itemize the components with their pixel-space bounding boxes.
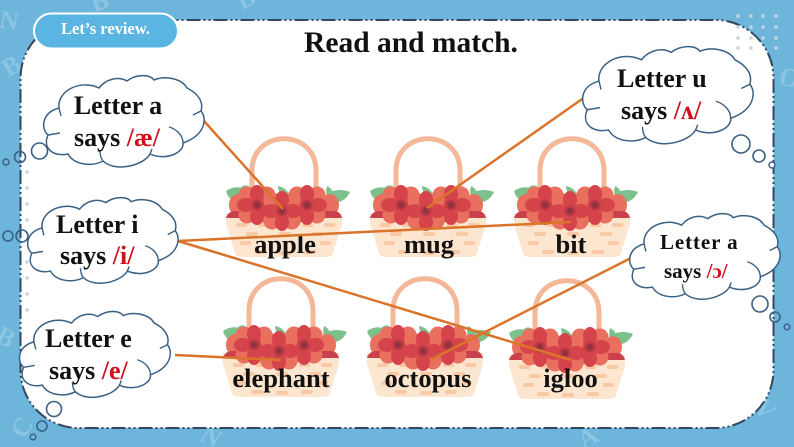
cloud: Letter e /e/: Letter e <box>45 324 132 353</box>
basket: octopus <box>367 279 491 397</box>
cloud: Letter a /ɔ/ <box>630 214 790 330</box>
cloud: Letter a /æ/: Letter a <box>74 91 162 120</box>
cloud: Letter e /e/ <box>19 311 170 440</box>
basket: bit <box>514 139 638 259</box>
pill: Let's review <box>34 14 178 48</box>
background letters: V <box>748 392 782 426</box>
basket: apple: apple <box>254 229 316 259</box>
matching lines <box>175 97 631 360</box>
background letters: C <box>5 412 39 443</box>
cloud: Letter a /ɔ/: Letter a <box>660 230 739 254</box>
decorative dots <box>25 14 778 312</box>
cloud: Letter u /ʌ/ <box>583 47 775 168</box>
basket: apple <box>226 139 350 259</box>
basket: mug: mug <box>404 229 454 259</box>
cloud: Letter a /æ/ <box>3 76 204 167</box>
basket: bit: bit <box>556 229 587 259</box>
cloud: Letter u /ʌ/: says /ʌ/ <box>621 96 702 125</box>
basket: igloo <box>509 281 633 399</box>
cloud: Letter a /ɔ/: says /ɔ/ <box>664 259 729 283</box>
cloud: Letter i /i/: says /i/ <box>60 241 135 270</box>
basket: octopus: octopus <box>385 363 471 393</box>
cloud: Letter i /i/ <box>3 198 178 283</box>
title: Read and match. <box>304 27 518 59</box>
pill: Let's review: Let’s review. <box>61 19 150 38</box>
cloud: Letter e /e/: says /e/ <box>49 356 129 385</box>
basket: mug <box>370 139 494 259</box>
cloud: Letter a /æ/: says /æ/ <box>74 123 161 152</box>
basket: elephant <box>223 279 347 397</box>
basket: elephant: elephant <box>232 363 330 393</box>
basket: igloo: igloo <box>543 363 598 393</box>
cloud: Letter u /ʌ/: Letter u <box>617 64 707 93</box>
cloud: Letter i /i/: Letter i <box>56 210 139 239</box>
